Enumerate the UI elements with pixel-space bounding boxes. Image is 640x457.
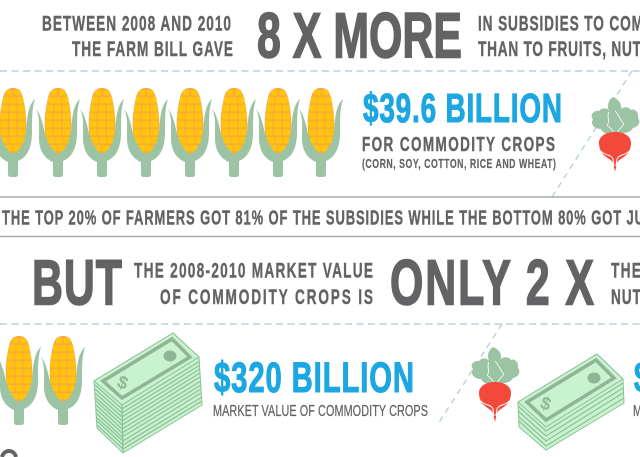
icon row: two corn cobs xyxy=(0,336,85,425)
icon row: eight corn cobs xyxy=(0,88,343,177)
commodity crops label: FOR COMMODITY CROPS xyxy=(362,132,555,156)
band statement: THE TOP 20% OF FARMERS GOT 81% OF THE SUBSIDIES WHILE THE BOTTOM 80% GOT JU xyxy=(2,207,640,229)
top heading: left lines: THE FARM BILL GAVE xyxy=(72,37,233,61)
icon: radish xyxy=(592,97,639,172)
commodity crops list: (CORN, SOY, COTTON, RICE AND WHEAT) xyxy=(362,158,556,171)
dollar sign on lower bill: $ xyxy=(538,392,554,415)
top heading: right lines: IN SUBSIDIES TO COM xyxy=(478,12,640,35)
icon: radish lower xyxy=(472,347,519,422)
second heading: BUT: BUT xyxy=(32,247,122,319)
top heading: 8 X MORE: 8 X MORE xyxy=(257,0,462,72)
second heading: left lines: THE 2008-2010 MARKET VALUE xyxy=(134,259,373,282)
top heading: right lines xyxy=(478,12,640,61)
second heading: ONLY 2 X: ONLY 2 X xyxy=(390,247,594,319)
dollar sign on bill: $ xyxy=(115,371,131,394)
icon: large money stack xyxy=(94,333,202,453)
second heading: left lines xyxy=(134,259,373,309)
market value amount: $320 BILLION xyxy=(214,353,414,401)
icon: small money stack xyxy=(518,354,624,450)
market value label: MARKET VALUE OF COMMODITY CROPS xyxy=(213,402,428,419)
second heading: left lines: OF COMMODITY CROPS IS xyxy=(160,285,373,309)
commodity crops amount: $39.6 BILLION xyxy=(363,86,562,131)
top heading: right lines: THAN TO FRUITS, NUT xyxy=(478,37,640,61)
top heading: left lines: BETWEEN 2008 AND 2010 xyxy=(42,12,231,35)
second heading: right lines xyxy=(611,259,640,309)
cropped lower heading glyph xyxy=(2,451,16,457)
top heading: left lines xyxy=(42,12,233,61)
